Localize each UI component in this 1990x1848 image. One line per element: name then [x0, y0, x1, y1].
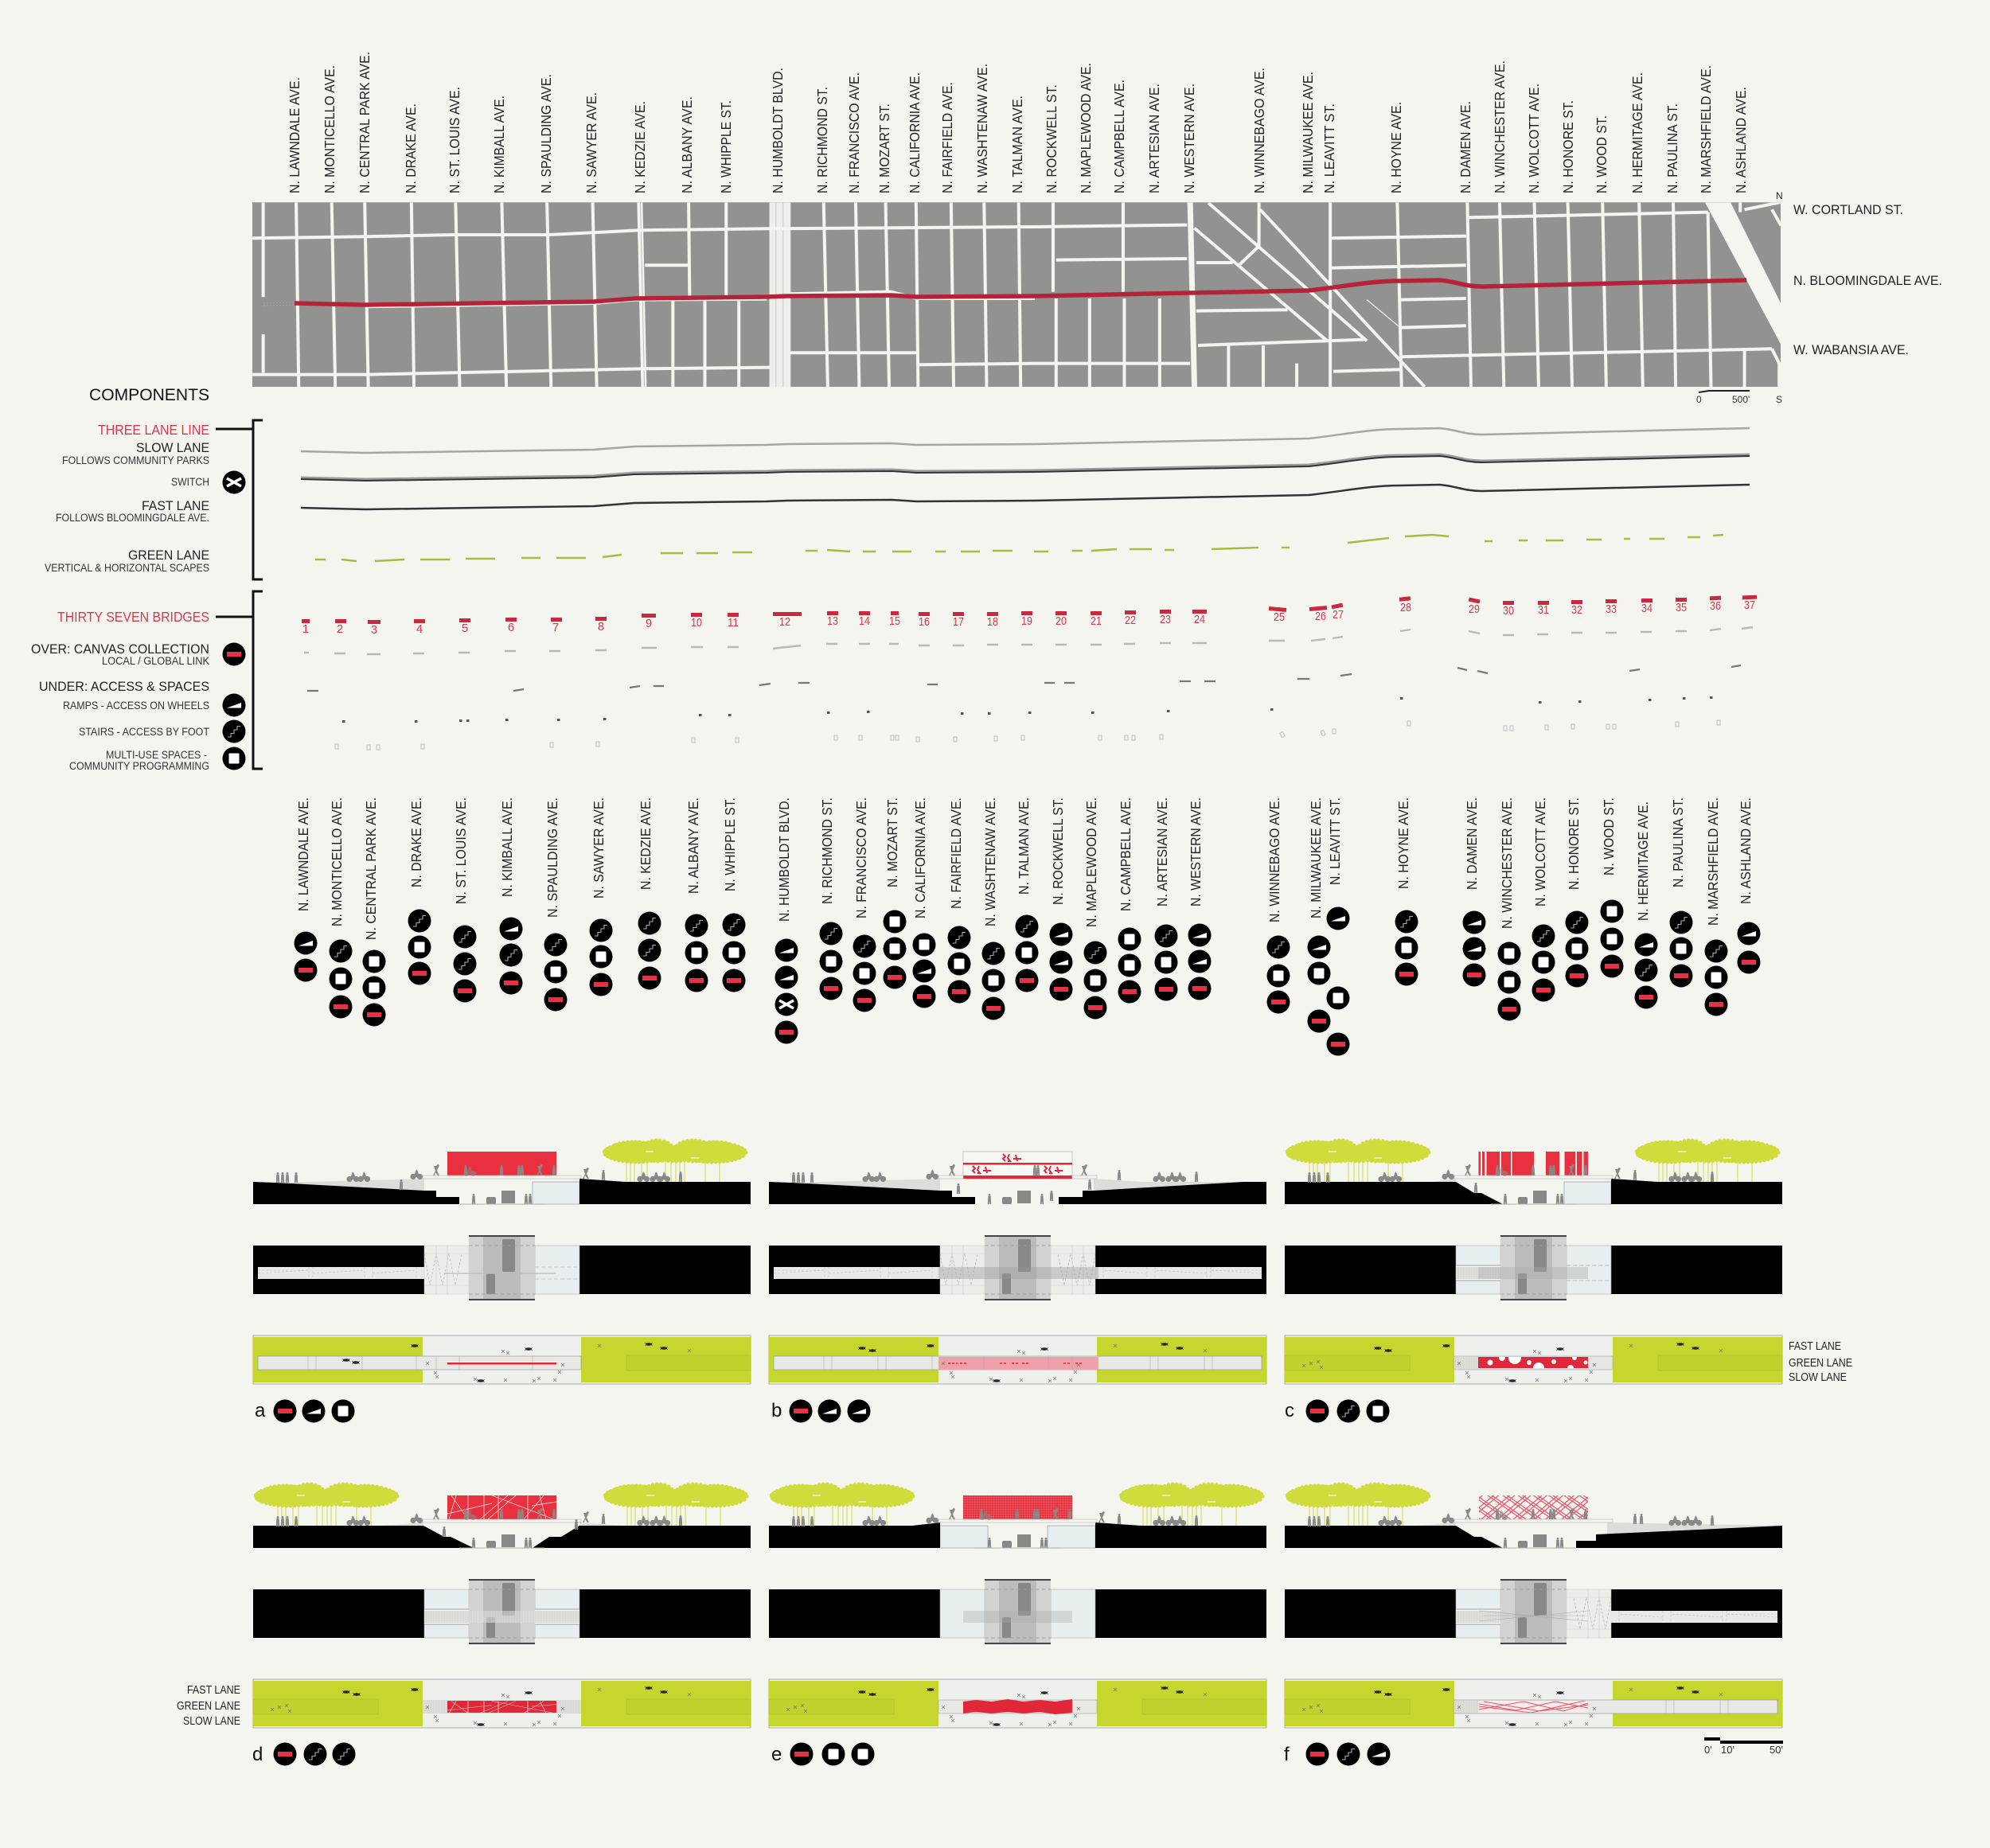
section scale bar	[1704, 1737, 1783, 1756]
bottom street labels: N. CENTRAL PARK AVE.	[363, 797, 379, 940]
section scale bar: 0'	[1704, 1744, 1712, 1756]
canvas marks row	[304, 627, 1753, 654]
component legend text: SWITCH	[171, 476, 209, 488]
bridge numbers: 23	[1160, 613, 1171, 626]
bottom street labels: N. FRANCISCO AVE.	[853, 797, 869, 918]
bottom street labels: N. MONTICELLO AVE.	[329, 797, 345, 926]
map north south scale: 0	[1696, 394, 1702, 405]
bottom street labels: N. KIMBALL AVE.	[499, 797, 515, 897]
bridge numbers: 4	[416, 622, 423, 636]
ramps marks row	[307, 665, 1741, 691]
component legend text: GREEN LANE	[128, 548, 209, 563]
bottom street labels: N. FAIRFIELD AVE.	[948, 797, 964, 909]
top street labels: N. ALBANY AVE.	[679, 96, 695, 193]
bridge numbers: 16	[919, 615, 930, 629]
top street labels: N. RICHMOND ST.	[814, 87, 830, 193]
panel b	[769, 1152, 1266, 1423]
bridge numbers: 7	[552, 621, 559, 634]
bridge numbers	[302, 598, 1755, 637]
cross street labels	[1793, 202, 1942, 357]
panel b: b	[771, 1400, 782, 1421]
panel a: a	[255, 1400, 266, 1421]
bridge numbers: 32	[1571, 603, 1582, 617]
component legend text: FOLLOWS COMMUNITY PARKS	[62, 454, 209, 466]
thirty seven bridges	[302, 595, 1757, 624]
bridge numbers: 29	[1469, 602, 1480, 616]
bottom street labels: N. DAMEN AVE.	[1464, 797, 1480, 890]
spaces marks row	[335, 720, 1720, 750]
lane labels right	[1789, 1339, 1852, 1384]
lane labels right: SLOW LANE	[1789, 1370, 1847, 1384]
bridge numbers: 13	[827, 614, 838, 628]
bottom street labels: N. MARSHFIELD AVE.	[1705, 797, 1721, 926]
bottom street labels	[295, 797, 1754, 940]
bridge numbers: 5	[462, 622, 468, 635]
cross street labels: W. WABANSIA AVE.	[1793, 342, 1909, 357]
bridge numbers: 11	[728, 616, 739, 630]
top street labels: N. ST. LOUIS AVE.	[447, 87, 462, 193]
top street labels: N. MILWAUKEE AVE.	[1300, 72, 1316, 193]
bridge numbers: 21	[1091, 614, 1102, 628]
component legend text: THIRTY SEVEN BRIDGES	[57, 609, 209, 625]
bottom street labels: N. DRAKE AVE.	[408, 797, 424, 887]
top street labels: N. MOZART ST.	[876, 103, 892, 193]
top street labels	[287, 52, 1749, 193]
top street labels: N. KIMBALL AVE.	[491, 96, 507, 193]
map north south scale: 500'	[1732, 394, 1750, 405]
lane labels right: FAST LANE	[1789, 1339, 1841, 1353]
bridge numbers: 35	[1676, 601, 1687, 614]
bridge numbers: 20	[1055, 614, 1067, 628]
top street labels: N. SAWYER AVE.	[583, 92, 599, 193]
component legend text: UNDER: ACCESS & SPACES	[39, 679, 209, 694]
top street labels: N. CALIFORNIA AVE.	[907, 72, 923, 193]
top street labels: N. WHIPPLE ST.	[718, 100, 734, 193]
lane labels right: GREEN LANE	[1789, 1356, 1852, 1370]
component legend text: MULTI-USE SPACES -	[106, 749, 207, 761]
bridge numbers: 27	[1333, 608, 1344, 622]
top street labels: N. DRAKE AVE.	[403, 103, 419, 193]
bottom street labels: N. WESTERN AVE.	[1188, 797, 1204, 906]
bridge numbers: 31	[1538, 603, 1549, 617]
top street labels: N. WOOD ST.	[1594, 115, 1610, 193]
green lane dashes	[315, 535, 1723, 561]
bridge numbers: 34	[1641, 602, 1652, 615]
component legend text: SLOW LANE	[136, 440, 209, 455]
bottom street labels: N. MILWAUKEE AVE.	[1308, 797, 1324, 918]
bridge numbers: 30	[1503, 604, 1514, 618]
bridge numbers: 3	[371, 623, 377, 637]
bottom street labels: N. TALMAN AVE.	[1016, 797, 1032, 895]
bottom street labels: N. SPAULDING AVE.	[544, 797, 560, 918]
bottom street labels: N. WASHTENAW AVE.	[982, 797, 998, 926]
bridge numbers: 15	[889, 614, 900, 628]
component legend text: FAST LANE	[142, 498, 209, 513]
bridge numbers: 33	[1606, 602, 1617, 616]
bridge numbers: 22	[1125, 614, 1136, 627]
panel c	[1285, 1140, 1782, 1423]
bottom street labels: N. CALIFORNIA AVE.	[912, 797, 928, 918]
top street labels: N. MAPLEWOOD AVE.	[1078, 63, 1094, 193]
lane labels left	[177, 1683, 240, 1728]
map north south scale	[1696, 190, 1783, 405]
top street labels: N. KEDZIE AVE.	[632, 101, 648, 193]
brackets	[216, 420, 263, 769]
component legend text: THREE LANE LINE	[98, 422, 209, 438]
street map	[252, 202, 1790, 388]
component legend text: VERTICAL & HORIZONTAL SCAPES	[45, 562, 209, 574]
bottom street labels: N. LAWNDALE AVE.	[295, 797, 311, 911]
component legend text	[31, 422, 209, 772]
bridge numbers: 25	[1274, 610, 1285, 624]
bottom street labels: N. KEDZIE AVE.	[638, 797, 654, 890]
component legend text: OVER: CANVAS COLLECTION	[31, 641, 209, 657]
component legend text: COMMUNITY PROGRAMMING	[69, 760, 209, 772]
top street labels: N. MARSHFIELD AVE.	[1698, 65, 1714, 193]
lane labels left: GREEN LANE	[177, 1699, 240, 1713]
bottom street labels: N. HONORE ST.	[1566, 797, 1582, 890]
top street labels: N. WASHTENAW AVE.	[974, 64, 990, 193]
icon columns for each street	[295, 899, 1761, 1055]
bridge numbers: 28	[1400, 601, 1411, 614]
bridge numbers: 2	[337, 622, 343, 636]
bottom street labels: N. RICHMOND ST.	[819, 797, 835, 904]
component legend text: LOCAL / GLOBAL LINK	[102, 655, 209, 667]
components heading: COMPONENTS	[89, 386, 209, 404]
bridge numbers: 18	[987, 615, 998, 629]
bottom street labels: N. MOZART ST.	[884, 797, 900, 887]
top street labels: N. LEAVITT ST.	[1321, 103, 1337, 193]
top street labels: N. HOYNE AVE.	[1388, 102, 1404, 193]
map north south scale: S	[1776, 394, 1782, 405]
top street labels: N. CENTRAL PARK AVE.	[357, 52, 373, 193]
top street labels: N. FRANCISCO AVE.	[846, 72, 862, 193]
bottom street labels: N. WHIPPLE ST.	[722, 797, 738, 891]
bottom street labels: N. PAULINA ST.	[1670, 797, 1686, 887]
bridge numbers: 36	[1710, 599, 1721, 613]
bottom street labels: N. WOLCOTT AVE.	[1532, 797, 1548, 906]
top street labels: N. WINNEBAGO AVE.	[1251, 68, 1267, 193]
top street labels: N. TALMAN AVE.	[1009, 96, 1025, 193]
bridge numbers: 37	[1744, 598, 1755, 612]
top street labels: N. CAMPBELL AVE.	[1111, 80, 1127, 193]
top street labels: N. HUMBOLDT BLVD.	[770, 68, 786, 193]
bridge numbers: 17	[953, 615, 964, 629]
cross street labels: N. BLOOMINGDALE AVE.	[1793, 273, 1942, 288]
bottom street labels: N. ROCKWELL ST.	[1050, 797, 1066, 905]
component legend text: FOLLOWS BLOOMINGDALE AVE.	[56, 512, 209, 524]
bridge numbers: 10	[691, 616, 702, 630]
bridge numbers: 6	[508, 621, 514, 634]
bridge numbers: 12	[779, 615, 790, 629]
top street labels: N. ASHLAND AVE.	[1733, 87, 1749, 193]
panel e	[769, 1484, 1266, 1765]
bottom street labels: N. LEAVITT ST.	[1327, 797, 1343, 885]
bottom street labels: N. MAPLEWOOD AVE.	[1083, 797, 1099, 927]
bottom street labels: N. HUMBOLDT BLVD.	[776, 797, 792, 922]
top street labels: N. DAMEN AVE.	[1457, 101, 1473, 193]
panel c: c	[1285, 1400, 1294, 1421]
top street labels: N. SPAULDING AVE.	[538, 74, 554, 193]
top street labels: N. WOLCOTT AVE.	[1526, 84, 1542, 193]
top street labels: N. MONTICELLO AVE.	[322, 65, 338, 193]
panel d	[252, 1484, 751, 1765]
panel a	[253, 1140, 751, 1423]
bridge numbers: 14	[859, 614, 870, 628]
map north south scale: N	[1776, 190, 1783, 201]
bottom street labels: N. ST. LOUIS AVE.	[453, 797, 469, 904]
bridge numbers: 8	[598, 620, 604, 634]
lane labels left: FAST LANE	[187, 1683, 240, 1697]
bottom street labels: N. ARTESIAN AVE.	[1154, 797, 1170, 906]
three lane lines	[301, 428, 1750, 509]
stairs marks row	[342, 696, 1713, 723]
panel f: f	[1284, 1744, 1290, 1765]
top street labels: N. PAULINA ST.	[1664, 103, 1680, 193]
cross street labels: W. CORTLAND ST.	[1793, 202, 1903, 217]
top street labels: N. ROCKWELL ST.	[1044, 84, 1059, 193]
panel e: e	[771, 1744, 782, 1765]
bottom street labels: N. WINCHESTER AVE.	[1499, 797, 1515, 929]
bottom street labels: N. HERMITAGE AVE.	[1635, 801, 1651, 921]
top street labels: N. WINCHESTER AVE.	[1492, 60, 1508, 193]
legend icons	[223, 471, 245, 770]
component legend text: STAIRS - ACCESS BY FOOT	[79, 726, 209, 738]
bridge numbers: 19	[1021, 614, 1032, 628]
top street labels: N. LAWNDALE AVE.	[287, 77, 302, 193]
bridge numbers: 9	[646, 617, 652, 630]
bottom street labels: N. HOYNE AVE.	[1395, 797, 1411, 889]
red bloomingdale line	[295, 280, 1746, 305]
top street labels: N. FAIRFIELD AVE.	[939, 82, 955, 193]
lane labels left: SLOW LANE	[183, 1714, 240, 1728]
top street labels: N. HERMITAGE AVE.	[1629, 72, 1645, 193]
bottom street labels: N. WOOD ST.	[1601, 797, 1617, 875]
bridge numbers: 26	[1315, 610, 1326, 623]
top street labels: N. ARTESIAN AVE.	[1146, 84, 1162, 193]
top street labels: N. WESTERN AVE.	[1181, 84, 1197, 193]
panel d: d	[252, 1744, 263, 1765]
bridge numbers: 24	[1194, 613, 1205, 626]
bottom street labels: N. ASHLAND AVE.	[1738, 797, 1754, 904]
section scale bar: 10'	[1721, 1744, 1734, 1756]
bottom street labels: N. CAMPBELL AVE.	[1118, 797, 1134, 911]
section scale bar: 50'	[1770, 1744, 1783, 1756]
bottom street labels: N. WINNEBAGO AVE.	[1266, 797, 1282, 922]
bottom street labels: N. ALBANY AVE.	[685, 797, 701, 894]
top street labels: N. HONORE ST.	[1560, 100, 1576, 193]
panel f	[1284, 1484, 1782, 1765]
bottom street labels: N. SAWYER AVE.	[591, 797, 607, 899]
bridge numbers: 1	[302, 622, 309, 636]
component legend text: RAMPS - ACCESS ON WHEELS	[63, 700, 209, 712]
